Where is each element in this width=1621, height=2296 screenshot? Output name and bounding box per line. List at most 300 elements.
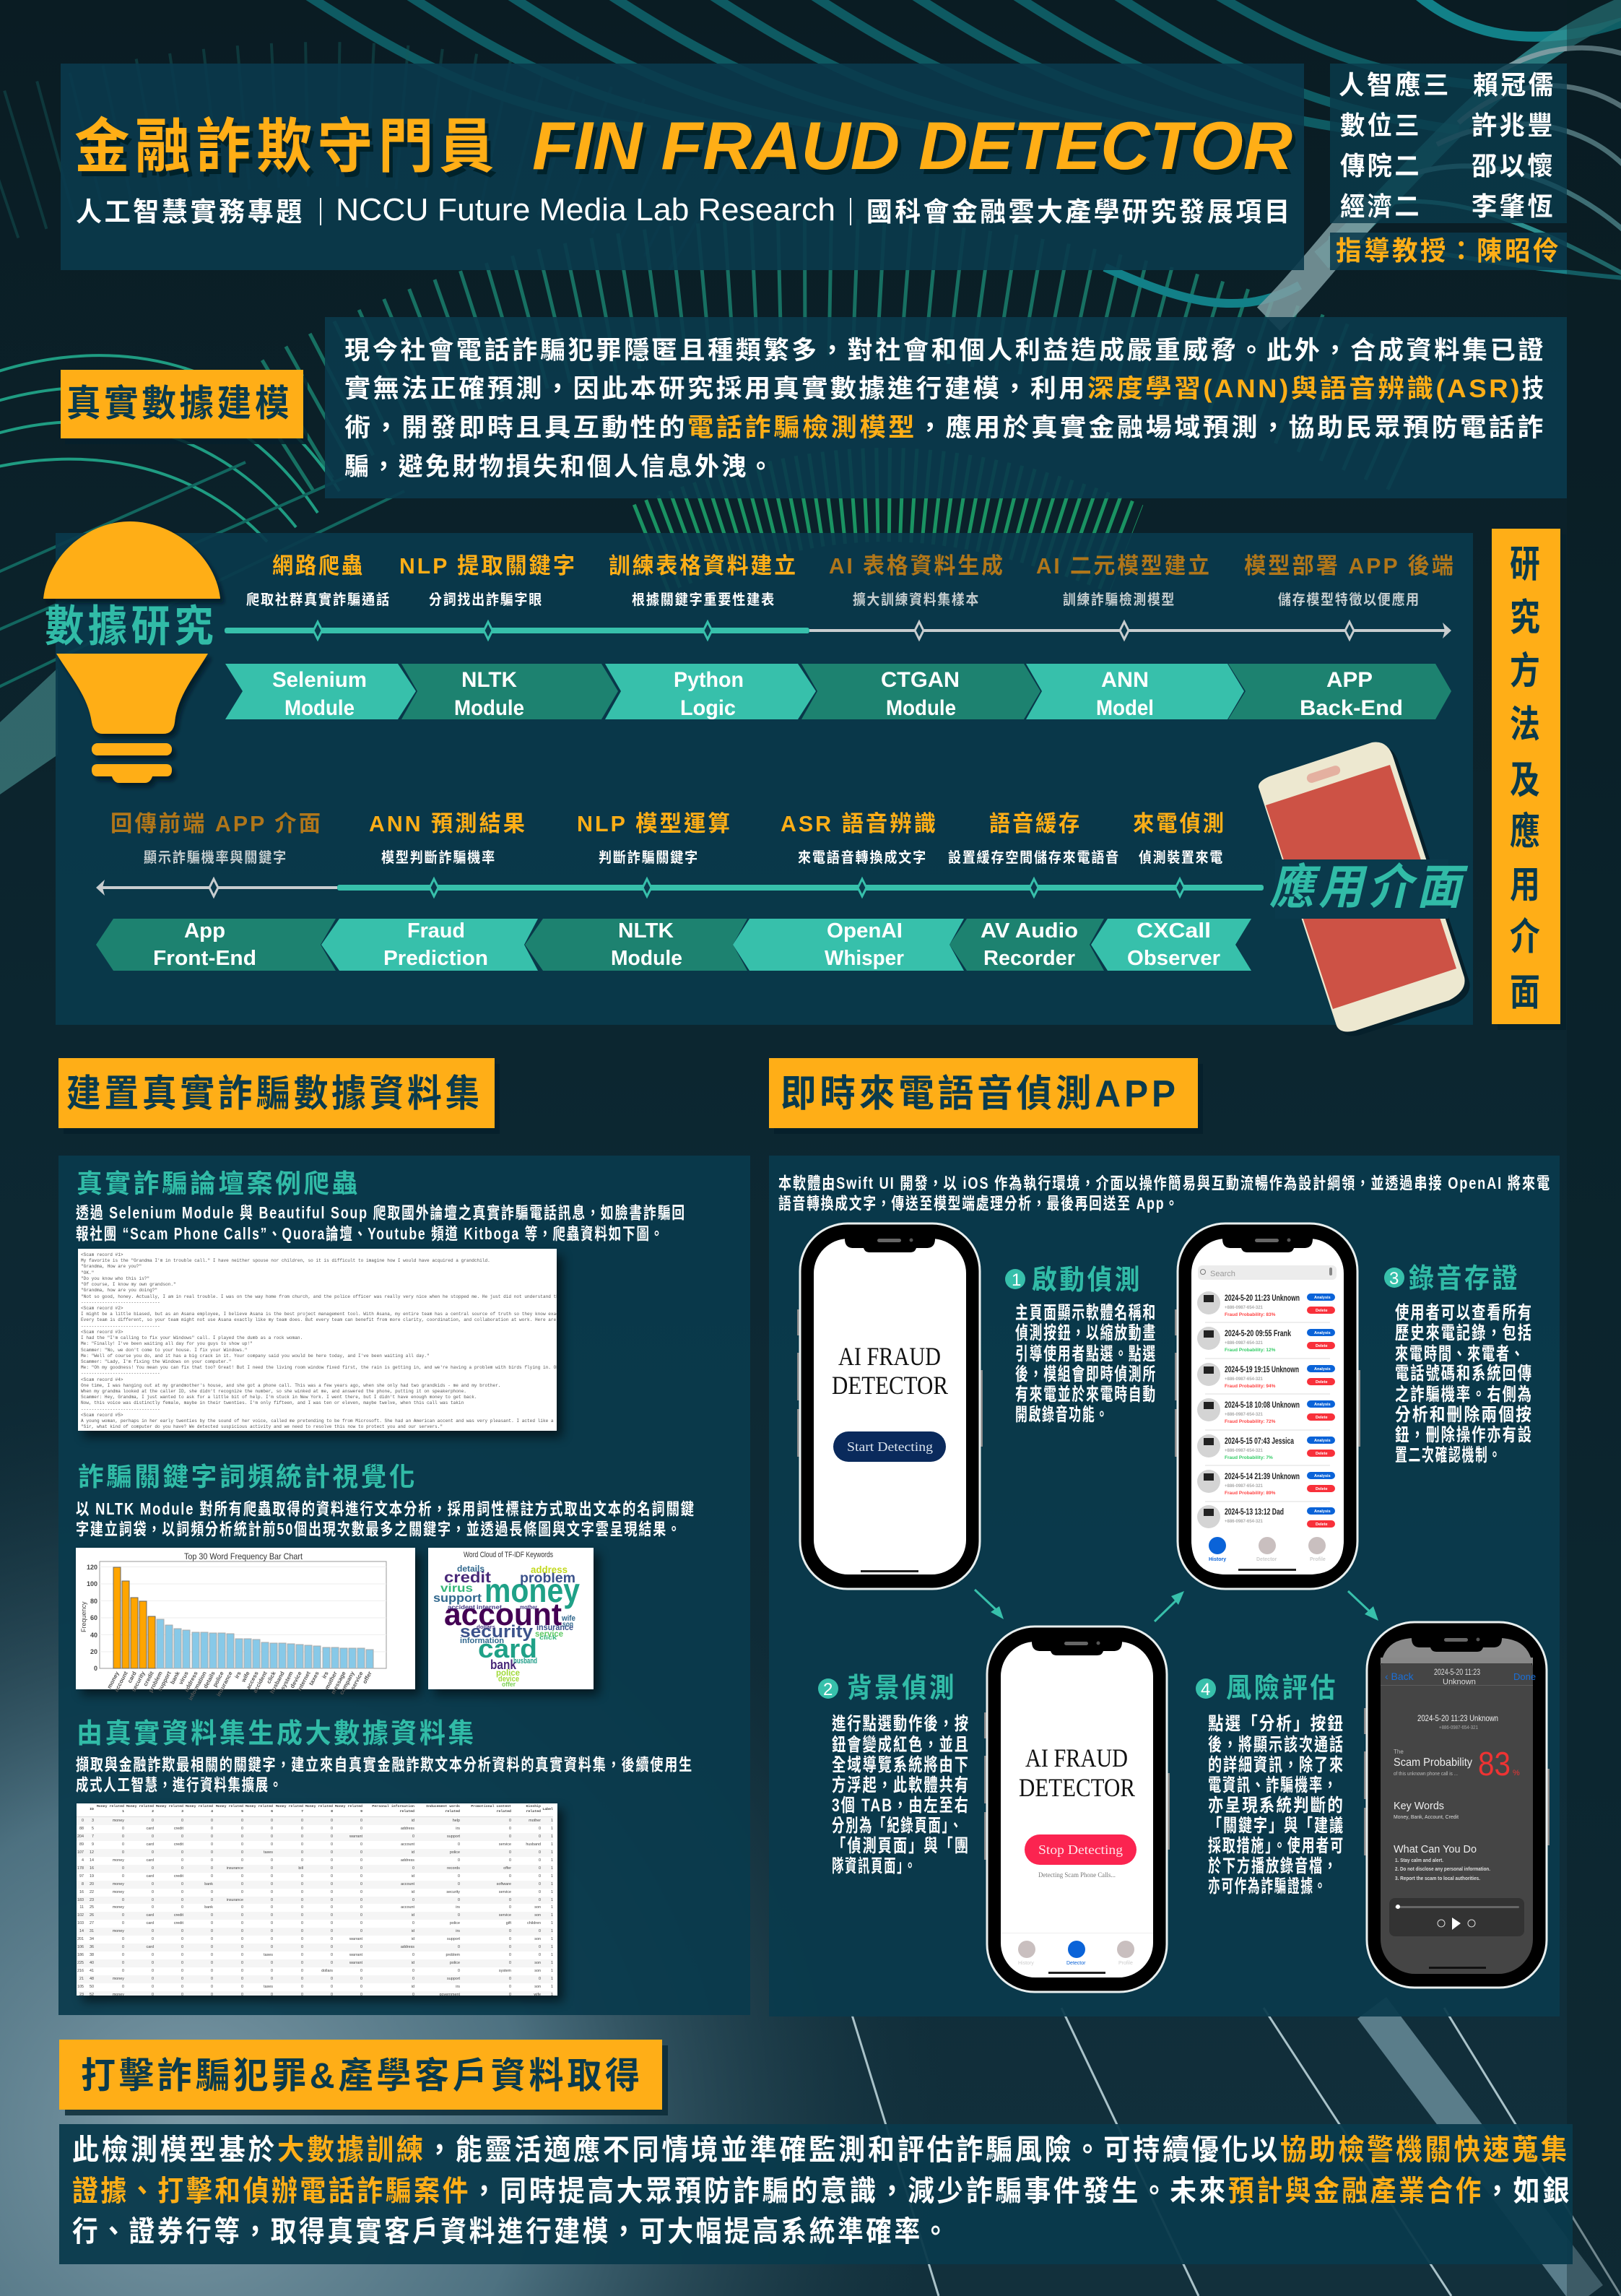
table: generated dataset: 1	[551, 1961, 553, 1965]
table: generated dataset: Money related 9	[335, 1805, 362, 1814]
heading: big dataset generation: 由真實資料集生成大數據資料集	[77, 1719, 477, 1749]
panel: vertical title research methods and application: 法	[1510, 704, 1543, 746]
call history rows: Fraud Probability: 12%	[1225, 1348, 1276, 1353]
step 4: risk assessment: 4	[1201, 1680, 1210, 1699]
step 3: recording evidence: 電話號碼和系統回傳	[1395, 1364, 1533, 1384]
table: generated dataset: 0	[360, 1977, 362, 1981]
table: generated dataset: 0	[211, 1929, 213, 1933]
table: generated dataset: 1	[551, 1937, 553, 1941]
step descriptions: application row: 顯示詐騙機率與關鍵字	[144, 849, 287, 866]
panel: authors: 經濟二	[1340, 191, 1422, 221]
call history rows: +886-0987-654-321	[1225, 1520, 1264, 1524]
table: generated dataset: 0	[271, 1842, 273, 1847]
table: generated dataset: 0	[241, 1961, 243, 1965]
table: generated dataset: 0	[539, 1850, 541, 1855]
table: generated dataset: card	[146, 1842, 154, 1847]
table: generated dataset: 0	[241, 1842, 243, 1847]
table: generated dataset: 0	[301, 1850, 303, 1855]
table: generated dataset: 0	[301, 1953, 303, 1957]
tab bar: Detector	[1256, 1557, 1277, 1562]
step 3: recording evidence: 3	[1389, 1269, 1399, 1288]
table: generated dataset: warrant	[349, 1834, 362, 1839]
table: generated dataset: 88	[79, 1827, 84, 1831]
table: generated dataset: card	[146, 1913, 154, 1918]
table: generated dataset: 0	[331, 1977, 333, 1981]
bar chart: access	[245, 1670, 260, 1691]
call history rows: Delete	[1316, 1522, 1328, 1527]
table: generated dataset: 0	[509, 1834, 511, 1839]
table: generated dataset: 0	[241, 1882, 243, 1886]
panel: authors: 邵以懷	[1472, 151, 1555, 181]
bar chart: husband	[269, 1671, 286, 1694]
chevrons: research modules: NLTK	[461, 668, 517, 692]
table: generated dataset: 0	[539, 1890, 541, 1894]
step 2: background detection: 背景偵測	[847, 1673, 957, 1704]
table: generated dataset: 0	[458, 1842, 460, 1847]
table: generated dataset: 0	[539, 1977, 541, 1981]
call history rows: Analysis	[1314, 1331, 1331, 1335]
table: generated dataset: Inducement words related	[426, 1805, 460, 1814]
panel: dataset	[58, 1156, 750, 2015]
table: generated dataset: 0	[509, 1858, 511, 1863]
table: generated dataset: money	[113, 1890, 124, 1894]
panel: introduction: 現今社會電話詐騙犯罪隱匿且種類繁多，對社會和個人利益造成嚴重威脅。此外，合成資料集已證	[344, 337, 1546, 365]
panel: introduction: 電話詐騙檢測模型	[687, 414, 917, 442]
step 3: recording evidence: 歷史來電記錄，包括	[1395, 1323, 1533, 1343]
phone 4: risk details: ‹ Back	[1385, 1671, 1414, 1682]
text: frequency description: 字建立詞袋，以詞頻分析統計前50個出現次數最多之關鍵字，並透過長條圖與文字雲呈現結果。	[76, 1520, 682, 1538]
step 4: risk assessment: 的詳細資訊，除了來	[1208, 1754, 1344, 1775]
panel: conclusion: 此檢測模型基於	[72, 2134, 277, 2166]
chevrons: application modules: Whisper	[825, 947, 904, 970]
table: generated dataset: service	[499, 1890, 511, 1894]
table: generated dataset: 0	[181, 1953, 183, 1957]
call history rows: Analysis	[1314, 1367, 1331, 1372]
table: generated dataset: address	[401, 1827, 414, 1831]
phone 4: risk details: 1. Stay calm and alert.	[1395, 1857, 1443, 1863]
subtitle: NCCU Future Media Lab Research	[336, 192, 835, 228]
table: generated dataset: Money related 2	[126, 1805, 154, 1814]
table: generated dataset: card	[146, 1858, 154, 1863]
table: generated dataset: 1	[551, 1913, 553, 1918]
table: generated dataset: money	[113, 1819, 124, 1823]
bar chart: details	[202, 1670, 217, 1689]
table: generated dataset: 0	[301, 1898, 303, 1902]
chevrons: research modules: Module	[284, 696, 355, 720]
table: generated dataset: 7	[92, 1834, 94, 1839]
step descriptions: research row: 爬取社群真實詐騙通話	[246, 591, 391, 608]
table: generated dataset: 1	[551, 1905, 553, 1910]
subtitle	[76, 192, 1292, 228]
table: generated dataset: 1	[551, 1866, 553, 1871]
table: generated dataset: 0	[271, 1977, 273, 1981]
panel: conclusion: 預計與金融產業合作	[1228, 2175, 1484, 2207]
table: generated dataset: support	[447, 1937, 460, 1941]
step 4: risk assessment: 點選「分析」按鈕	[1208, 1714, 1344, 1734]
table: generated dataset: 0	[181, 1905, 183, 1910]
table: generated dataset: 41	[90, 1969, 94, 1973]
table: generated dataset: bill	[298, 1866, 303, 1871]
table: generated dataset: 0	[301, 1969, 303, 1973]
call history rows: Delete	[1316, 1380, 1328, 1385]
table: generated dataset: 0	[271, 1898, 273, 1902]
table: generated dataset: problem	[446, 1953, 460, 1957]
table: generated dataset: 0	[122, 1866, 124, 1871]
timeline: application row	[96, 879, 1264, 896]
table: generated dataset: son	[534, 1969, 541, 1973]
table: generated dataset: 0	[509, 1929, 511, 1933]
bar chart: 120	[87, 1564, 97, 1571]
call history rows: Delete	[1316, 1487, 1328, 1491]
panel: conclusion: ，能靈活適應不同情境並準確監測和評估詐騙風險。可持續優化以	[426, 2134, 1280, 2166]
table: generated dataset: 0	[301, 1882, 303, 1886]
table: generated dataset: 0	[181, 1882, 183, 1886]
call history rows: Delete	[1316, 1344, 1328, 1348]
step 2: background detection: 鈕會變成紅色，並且	[832, 1735, 970, 1755]
table: generated dataset: 0	[152, 1937, 154, 1941]
table: generated dataset: 0	[360, 1866, 362, 1871]
word cloud: account	[444, 1597, 562, 1632]
call history rows: Analysis	[1314, 1439, 1331, 1443]
phone 2: detecting screen: History	[1018, 1961, 1034, 1966]
phone 4: risk details: 2024-5-20 11:23	[1434, 1667, 1480, 1677]
table: generated dataset: credit	[174, 1842, 183, 1847]
tab bar: Profile	[1310, 1557, 1326, 1562]
bar chart: offer	[361, 1671, 373, 1685]
table: generated dataset: 0	[271, 1834, 273, 1839]
table: generated dataset: 1	[551, 1858, 553, 1863]
table: generated dataset: 14	[79, 1929, 84, 1933]
step 3: recording evidence: 來電時間、來電者、	[1395, 1344, 1525, 1364]
table: generated dataset: 0	[331, 1866, 333, 1871]
bar chart: security	[130, 1670, 147, 1693]
table: generated dataset: insurance	[227, 1866, 243, 1871]
panel: conclusion: ，如銀	[1484, 2175, 1572, 2207]
table: generated dataset: irs	[456, 1905, 460, 1910]
call history rows: Fraud Probability: 83%	[1225, 1312, 1276, 1317]
table: generated dataset: Money related 4	[186, 1805, 213, 1814]
phone 2: detecting screen: AI FRAUD	[1025, 1743, 1128, 1772]
table: generated dataset: id	[412, 1985, 414, 1989]
step descriptions: research row: 根據關鍵字重要性建表	[632, 591, 775, 608]
table: generated dataset: 0	[331, 1945, 333, 1949]
timeline: research row	[225, 622, 1451, 639]
text: big dataset description: 擷取與金融詐欺最相關的關鍵字，建立來自真實金融詐欺文本分析資料的真實資料集，後續使用生	[76, 1755, 693, 1774]
heading: crawling: 真實詐騙論壇案例爬蟲	[77, 1169, 360, 1198]
call history rows: +886-0987-654-321	[1225, 1377, 1264, 1382]
heading: fighting fraud and client data	[59, 2040, 668, 2115]
table: generated dataset: address	[401, 1858, 414, 1863]
table: generated dataset: 0	[301, 1929, 303, 1933]
bar chart: 100	[87, 1580, 97, 1587]
table: generated dataset: offer	[503, 1866, 511, 1871]
table: generated dataset: 0	[360, 1913, 362, 1918]
panel: vertical title research methods and application: 應	[1510, 811, 1543, 853]
bar chart: police	[212, 1670, 225, 1688]
table: generated dataset: 0	[122, 1850, 124, 1855]
phone 4: risk details: of this unknown phone call is ...	[1394, 1772, 1458, 1777]
table: generated dataset: 0	[412, 1921, 414, 1925]
table: generated dataset: 0	[331, 1961, 333, 1965]
bar chart: account	[113, 1670, 129, 1693]
phone 4: risk details: %	[1513, 1769, 1520, 1777]
panel: authors: 賴冠儒	[1473, 70, 1556, 100]
table: generated dataset: card	[146, 1921, 154, 1925]
main title: FIN FRAUD DETECTOR	[532, 108, 1292, 183]
table: generated dataset: 0	[360, 1929, 362, 1933]
table: generated dataset: card	[146, 1945, 154, 1949]
word cloud: Word Cloud of TF-IDF Keywords	[464, 1551, 553, 1559]
call history rows: +886-0987-654-321	[1225, 1306, 1264, 1310]
table: generated dataset: son	[534, 1913, 541, 1918]
table: generated dataset: 89	[79, 1842, 84, 1847]
step 4: risk assessment: 於下方播放錄音檔，	[1208, 1855, 1338, 1876]
table: generated dataset: 19	[90, 1874, 94, 1879]
table: generated dataset: warrant	[349, 1961, 362, 1965]
panel: authors: 許兆豐	[1472, 111, 1555, 140]
table: generated dataset: address	[401, 1945, 414, 1949]
table: generated dataset: 0	[152, 1969, 154, 1973]
table: generated dataset: 0	[271, 1890, 273, 1894]
table: generated dataset: 1	[551, 1819, 553, 1823]
word cloud: bank	[490, 1658, 517, 1672]
table: generated dataset: 1	[551, 1985, 553, 1989]
table: generated dataset: 0	[301, 1905, 303, 1910]
table: generated dataset: 0	[241, 1985, 243, 1989]
table: generated dataset: 0	[271, 1913, 273, 1918]
step descriptions: research row: 訓練詐騙檢測模型	[1063, 591, 1175, 608]
chevrons: research modules: ANN	[1101, 668, 1149, 692]
table: generated dataset: bank	[204, 1905, 213, 1910]
table: generated dataset: 0	[331, 1937, 333, 1941]
table: generated dataset: 0	[122, 1898, 124, 1902]
table: generated dataset: taxes	[264, 1985, 273, 1989]
step headings: application row: 語音緩存	[989, 811, 1082, 836]
table: generated dataset: 34	[90, 1937, 94, 1941]
heading: real-time call speech detection app: 即時來電語音偵測APP	[781, 1073, 1179, 1115]
table: generated dataset: 0	[331, 1842, 333, 1847]
step headings: research row: AI 二元模型建立	[1036, 553, 1212, 579]
step headings: application row: 回傳前端 APP 介面	[110, 811, 323, 836]
text: big dataset description: 成式人工智慧，進行資料集擴展。	[76, 1775, 283, 1794]
table: generated dataset: Money related 5	[216, 1805, 243, 1814]
table: generated dataset: 0	[152, 1977, 154, 1981]
panel: vertical title research methods and application: 面	[1510, 972, 1543, 1014]
step 2: background detection: 全域導覽系統將由下	[832, 1755, 970, 1775]
panel: vertical title research methods and application: 及	[1510, 760, 1543, 802]
chevrons: application modules: Recorder	[983, 947, 1075, 970]
phone 4: risk details	[1364, 1622, 1550, 1988]
call history rows: Delete	[1316, 1416, 1328, 1420]
table: generated dataset: card	[146, 1827, 154, 1831]
chevrons: application modules	[96, 919, 1251, 971]
table: generated dataset: 0	[152, 1929, 154, 1933]
call history rows: 2024-5-20 11:23 Unknown	[1225, 1293, 1300, 1303]
panel: authors	[1330, 64, 1567, 223]
table: generated dataset: taxes	[264, 1953, 273, 1957]
bar chart: wife	[240, 1670, 251, 1684]
step 4: risk assessment: 風險評估	[1226, 1673, 1338, 1704]
table: generated dataset: 0	[412, 1969, 414, 1973]
table: generated dataset: 0	[331, 1819, 333, 1823]
table: generated dataset: 0	[271, 1937, 273, 1941]
word cloud: offer	[502, 1681, 516, 1688]
label: application interface: 應用介面	[1269, 860, 1469, 914]
table: generated dataset: help	[453, 1819, 460, 1823]
step 2: background detection: 進行點選動作後，按	[832, 1714, 970, 1734]
table: generated dataset: 27	[90, 1921, 94, 1925]
panel: vertical title research methods and application: 方	[1510, 651, 1543, 693]
phone 1: start screen	[797, 1223, 983, 1589]
table: generated dataset: 1	[551, 1882, 553, 1886]
table: generated dataset: 0	[301, 1819, 303, 1823]
table: generated dataset: 4	[82, 1858, 84, 1863]
table: generated dataset: 0	[539, 1953, 541, 1957]
table: generated dataset: 0	[181, 1850, 183, 1855]
bar chart: virus	[178, 1670, 190, 1686]
bar chart: 0	[94, 1665, 97, 1672]
word cloud: dollars	[477, 1625, 495, 1630]
phone 4: risk details: Unknown	[1443, 1678, 1476, 1686]
table: generated dataset: 0	[271, 1882, 273, 1886]
phone 1: start screen: DETECTOR	[832, 1371, 948, 1400]
table: generated dataset: 0	[360, 1985, 362, 1989]
call history rows: +886-0987-654-321	[1225, 1413, 1264, 1417]
panel: introduction: 實無法正確預測，因此本研究採用真實數據進行建模，利用	[344, 375, 1087, 403]
table: generated dataset: 0	[211, 1921, 213, 1925]
table: generated dataset: 0	[509, 1945, 511, 1949]
tab bar: History	[1209, 1557, 1226, 1562]
call history rows: +886-0987-654-321	[1225, 1449, 1264, 1453]
word cloud: internet	[477, 1604, 502, 1611]
table: generated dataset: 0	[271, 1929, 273, 1933]
call history rows: +886-0987-654-321	[1225, 1484, 1264, 1489]
word cloud: mother	[520, 1604, 537, 1611]
table: generated dataset: warrant	[349, 1953, 362, 1957]
panel: vertical title research methods and application: 用	[1510, 865, 1543, 906]
table: generated dataset: 0	[271, 1921, 273, 1925]
call history rows: 2024-5-14 21:39 Unknown	[1225, 1471, 1300, 1481]
table: generated dataset: 0	[271, 1961, 273, 1965]
table: generated dataset: 0	[181, 1969, 183, 1973]
step 2: background detection: 分別為「紀錄頁面」、	[832, 1816, 963, 1836]
table: generated dataset: 0	[360, 1858, 362, 1863]
bar chart: 80	[90, 1598, 97, 1605]
table: generated dataset	[77, 1803, 557, 1996]
table: generated dataset: 0	[241, 1858, 243, 1863]
step 4: risk assessment	[1196, 1673, 1344, 1897]
bar chart: device	[289, 1670, 303, 1689]
panel: conclusion: 協助檢警機關快速蒐集	[1280, 2134, 1570, 2166]
table: generated dataset: 0	[181, 1834, 183, 1839]
main title	[74, 108, 1292, 183]
table: generated dataset: 0	[271, 1905, 273, 1910]
panel: authors: 李肇恆	[1472, 191, 1555, 221]
table: generated dataset: account	[401, 1905, 414, 1910]
table: generated dataset: money	[113, 1929, 124, 1933]
table: generated dataset: 107	[77, 1850, 84, 1855]
table: generated dataset: Money related 6	[245, 1805, 273, 1814]
word cloud: money	[484, 1572, 580, 1609]
table: generated dataset: 0	[360, 1827, 362, 1831]
table: generated dataset: 0	[331, 1850, 333, 1855]
table: generated dataset: 0	[211, 1898, 213, 1902]
bar chart: bank	[169, 1670, 181, 1685]
table: generated dataset: software	[497, 1882, 511, 1886]
table: generated dataset: 0	[360, 1819, 362, 1823]
arrow: phone 2 to phone 3	[1155, 1591, 1184, 1621]
phone 1: start screen: Start Detecting	[847, 1439, 933, 1454]
table: generated dataset: 14	[90, 1858, 94, 1863]
bar chart: irs	[233, 1670, 243, 1680]
step 3: recording evidence: 鈕，刪除操作亦有設	[1395, 1424, 1533, 1445]
table: generated dataset: 0	[211, 1834, 213, 1839]
call history rows: Fraud Probability: 94%	[1225, 1384, 1276, 1389]
step descriptions: research row: 分詞找出詐騙字眼	[429, 591, 543, 608]
word cloud: credit	[444, 1569, 491, 1586]
table: generated dataset: 0	[122, 1921, 124, 1925]
table: generated dataset: 0	[509, 1977, 511, 1981]
chevrons: research modules: Python	[674, 668, 744, 692]
step headings: research row	[272, 553, 1456, 579]
table: generated dataset: 0	[181, 1985, 183, 1989]
text: frequency description: 以 NLTK Module 對所有爬蟲取得的資料進行文本分析，採用詞性標註方式取出文本的名詞關鍵	[76, 1499, 695, 1518]
chevrons: research modules: Model	[1096, 696, 1154, 720]
table: generated dataset: 0	[509, 1827, 511, 1831]
panel: conclusion: 行、證券行等，取得真實客戶資料進行建模，可大幅提高系統準確率。	[72, 2216, 951, 2248]
call history rows: Fraud Probability: 7%	[1225, 1455, 1273, 1460]
step headings: application row: NLP 模型運算	[577, 811, 732, 836]
phone 2: detecting screen: Detector	[1066, 1961, 1086, 1966]
label: data research: 數據研究	[45, 602, 217, 651]
bar chart: money	[106, 1670, 121, 1690]
table: generated dataset: 5	[92, 1827, 94, 1831]
panel: vertical title research methods and application: 介	[1510, 917, 1543, 958]
arrow: phone 3 to phone 4	[1348, 1591, 1378, 1621]
table: generated dataset: 0	[211, 1866, 213, 1871]
table: generated dataset: 1	[551, 1850, 553, 1855]
panel: research methods	[43, 521, 1473, 1036]
table: generated dataset: support	[447, 1977, 460, 1981]
table: generated dataset: 0	[211, 1977, 213, 1981]
table: generated dataset: 0	[509, 1850, 511, 1855]
table: generated dataset: 0	[152, 1866, 154, 1871]
step 3: recording evidence: 分析和刪除兩個按	[1395, 1404, 1533, 1425]
step 1: start detecting: 主頁面顯示軟體名稱和	[1015, 1303, 1157, 1323]
table: generated dataset: 0	[509, 1961, 511, 1965]
table: generated dataset: 0	[301, 1827, 303, 1831]
table: generated dataset: 0	[241, 1953, 243, 1957]
table: generated dataset: 0	[122, 1834, 124, 1839]
table: generated dataset: 0	[301, 1985, 303, 1989]
table: generated dataset: 216	[77, 1969, 84, 1973]
chevrons: application modules: Observer	[1127, 947, 1220, 970]
table: generated dataset: 0	[181, 1929, 183, 1933]
table: generated dataset: 0	[122, 1961, 124, 1965]
table: generated dataset: 0	[301, 1858, 303, 1863]
table: generated dataset: credit	[174, 1827, 183, 1831]
table: generated dataset: son	[534, 1961, 541, 1965]
table: generated dataset: 0	[458, 1874, 460, 1879]
bar chart: insurance	[215, 1670, 234, 1697]
table: generated dataset: 0	[152, 1819, 154, 1823]
table: generated dataset: 0	[331, 1882, 333, 1886]
table: generated dataset: 0	[241, 1969, 243, 1973]
call history rows: Analysis	[1314, 1509, 1331, 1514]
table: generated dataset: 0	[412, 1977, 414, 1981]
table: generated dataset: 0	[331, 1858, 333, 1863]
bar chart: accident	[252, 1670, 269, 1694]
